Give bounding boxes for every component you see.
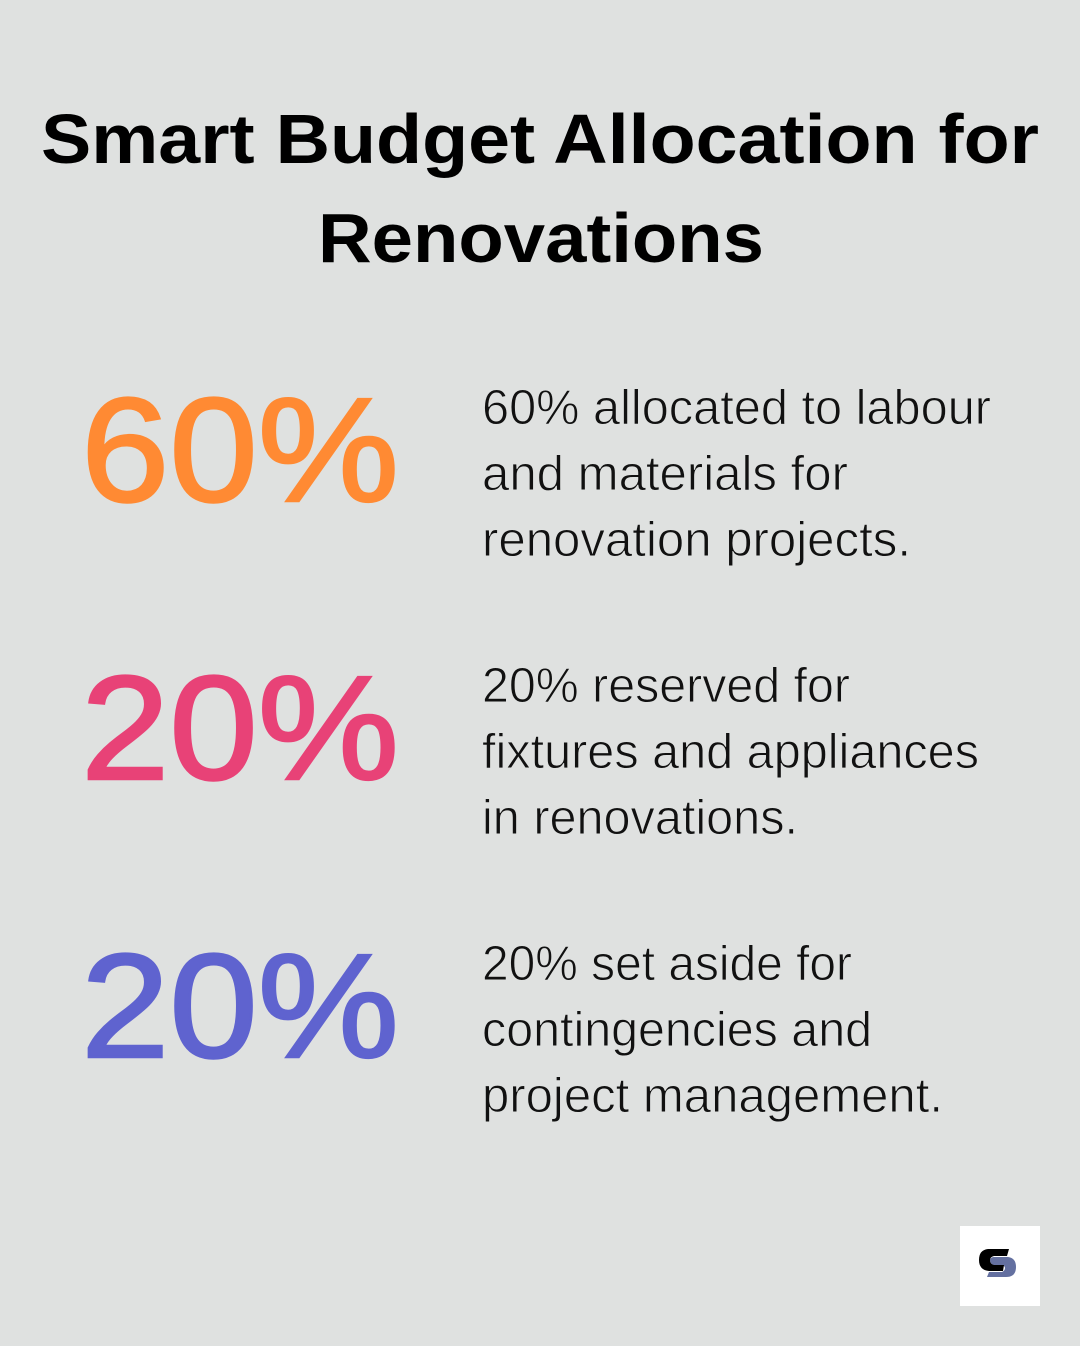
icon: S logo black part xyxy=(979,1249,1009,1271)
description: contingencies and project management: contingencies and xyxy=(482,1003,872,1057)
description: labour and materials: and materials for xyxy=(482,447,848,501)
icon: S logo blue part xyxy=(987,1257,1016,1277)
stat: 60% labour and materials xyxy=(81,368,991,567)
description: labour and materials: renovation projects. xyxy=(482,513,911,567)
logo badge xyxy=(960,1226,1040,1306)
description: contingencies and project management: 20% set aside for xyxy=(482,937,852,991)
stat: 20% contingencies and project management xyxy=(81,924,943,1123)
title xyxy=(41,100,1039,277)
number: 20%: 20% xyxy=(81,924,399,1089)
description: fixtures and appliances: in renovations. xyxy=(482,791,798,845)
title: Smart Budget Allocation for xyxy=(41,100,1039,178)
description: labour and materials: 60% allocated to labour xyxy=(482,381,991,435)
title: Renovations xyxy=(318,199,764,277)
description: fixtures and appliances: fixtures and appliances xyxy=(482,725,979,779)
description: labour and materials xyxy=(482,381,991,567)
stat: 20% fixtures and appliances xyxy=(81,646,979,845)
number: 20%: 20% xyxy=(81,646,399,811)
number: 60%: 60% xyxy=(81,368,399,533)
description: contingencies and project management xyxy=(482,937,943,1123)
description: fixtures and appliances: 20% reserved for xyxy=(482,659,850,713)
description: fixtures and appliances xyxy=(482,659,979,845)
description: contingencies and project management: project management. xyxy=(482,1069,943,1123)
